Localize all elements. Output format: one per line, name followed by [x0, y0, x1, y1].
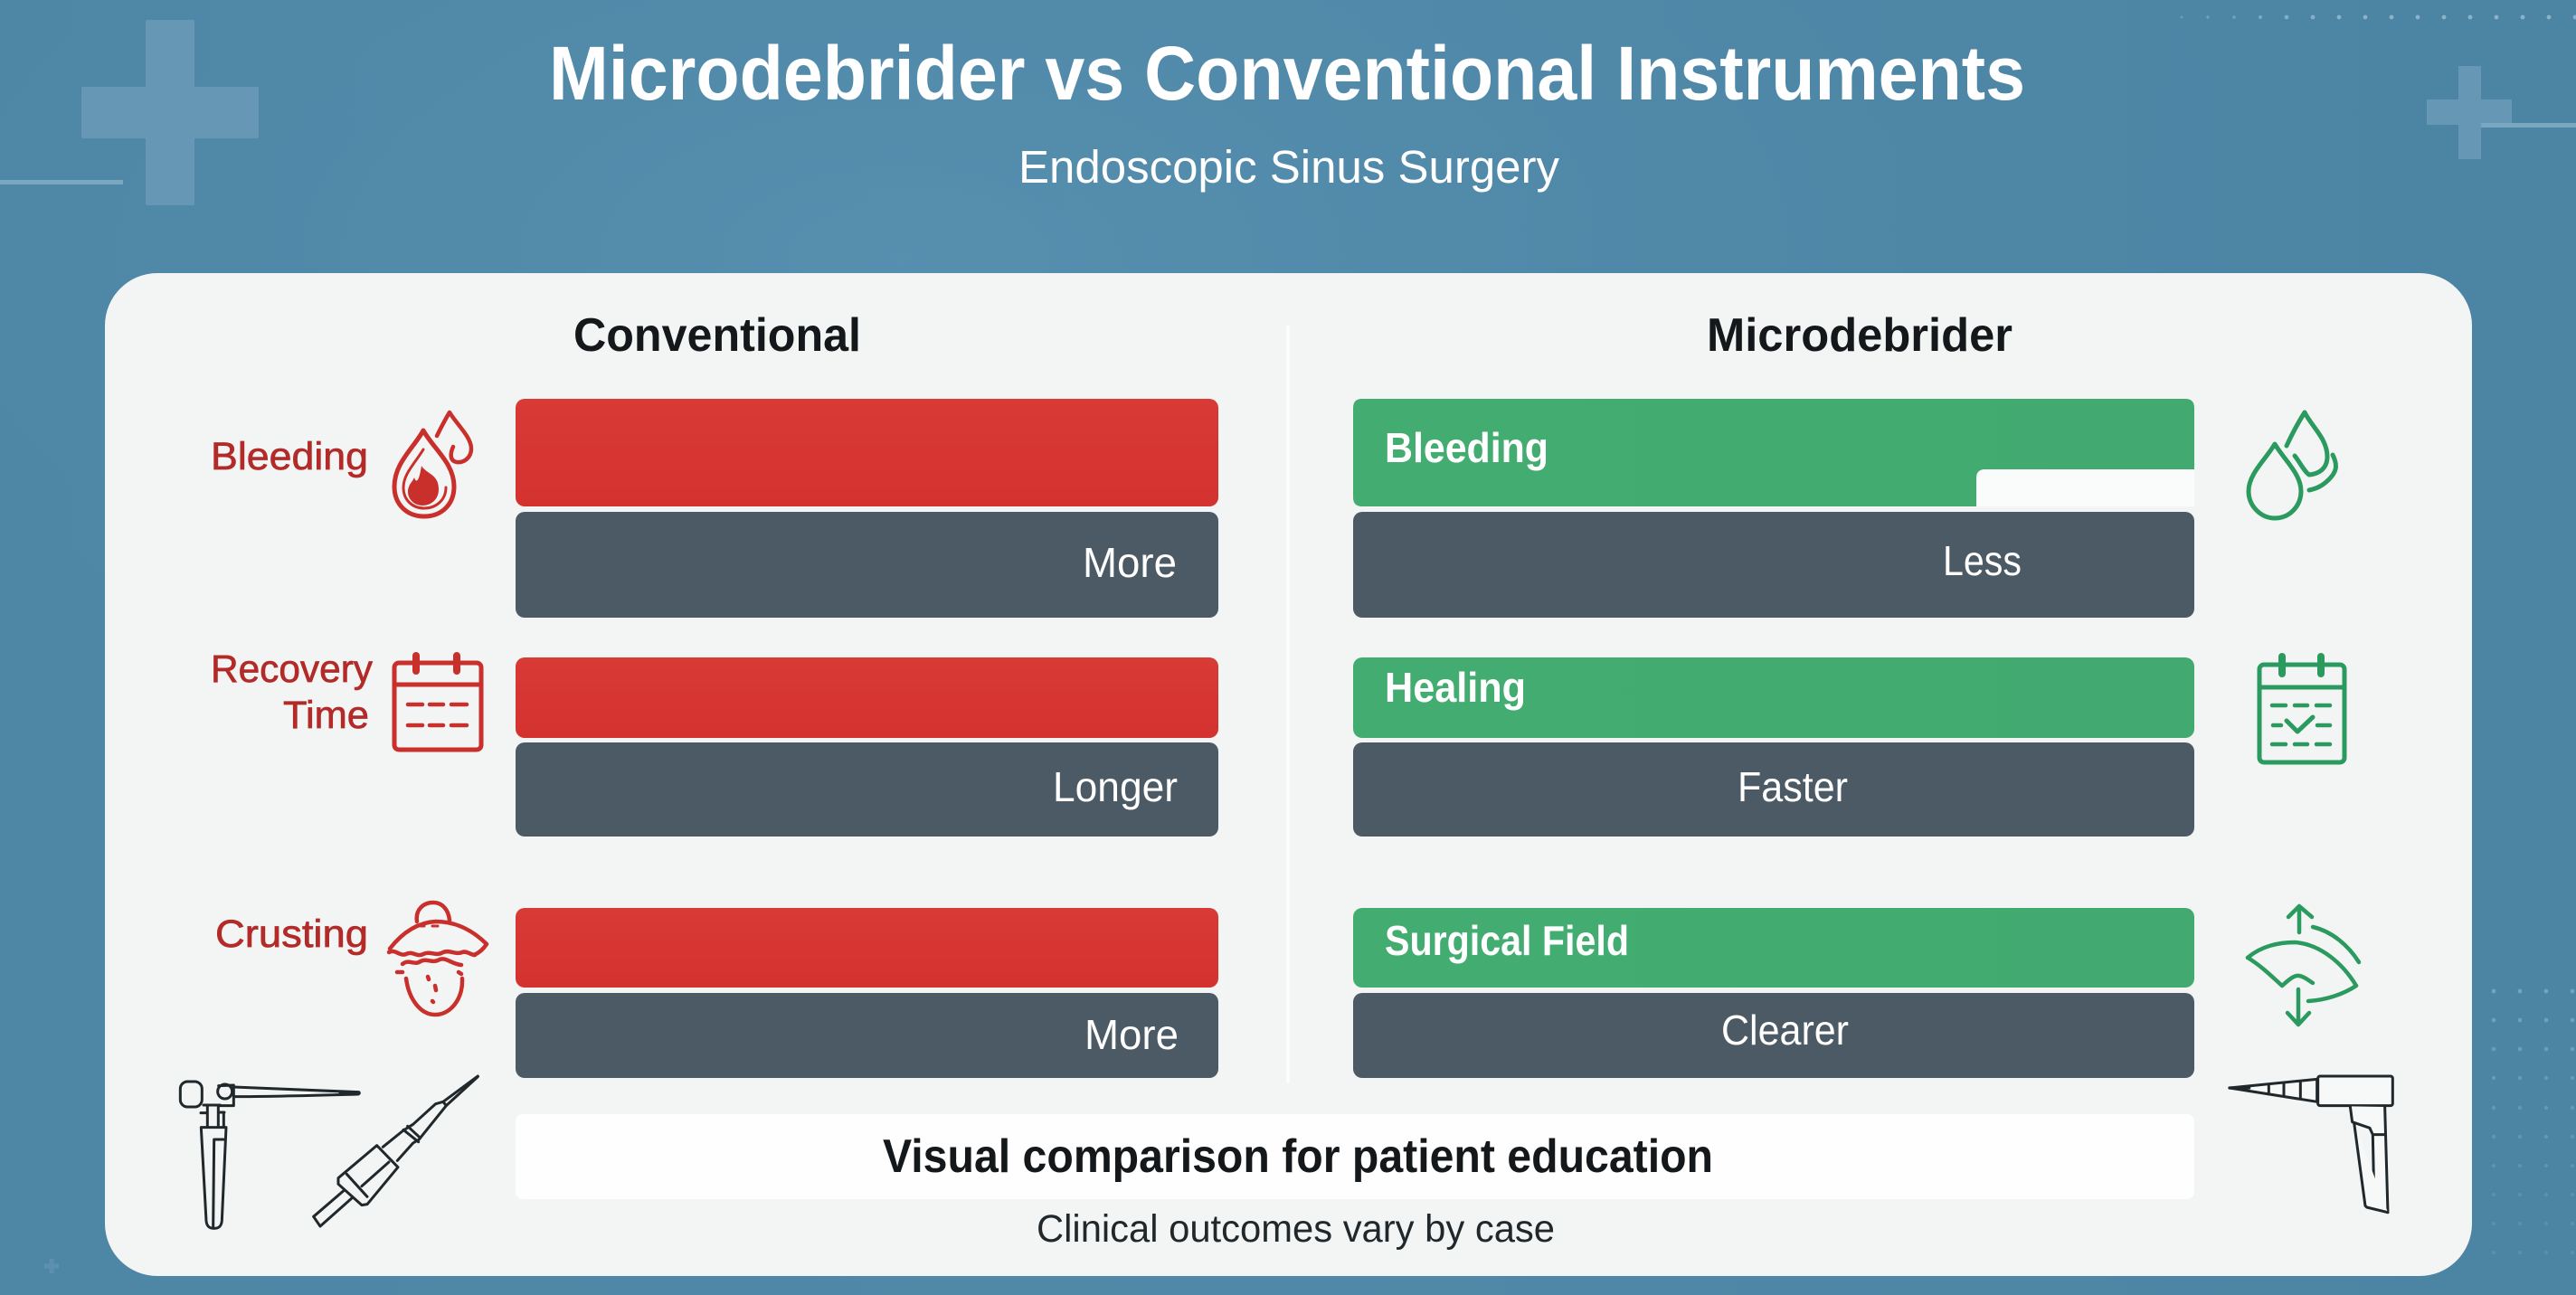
bar: surgical field: Surgical Field	[1385, 917, 1629, 964]
bar: surgical field result: Clearer	[1721, 1007, 1849, 1054]
faint cross bottom-left	[44, 1259, 59, 1273]
bar: healing	[1353, 657, 2194, 738]
decorative dots bottom-right	[2492, 989, 2574, 1254]
icon: red blood drops	[394, 412, 471, 516]
decorative cross top-right	[2427, 66, 2576, 159]
heading: conventional: Conventional	[573, 309, 861, 362]
bar: bleeding severity with notch	[1353, 399, 2194, 506]
bar: bleeding severity	[516, 399, 1218, 506]
icon: microdebrider handpiece	[2230, 1076, 2392, 1213]
label: recovery time: Time	[283, 694, 369, 737]
bar: bleeding severity with notch: Bleeding	[1385, 424, 1548, 471]
bar: surgical field	[1353, 908, 2194, 988]
icon: green calendar with check	[2259, 657, 2344, 762]
icon: conventional suction instrument	[314, 1076, 478, 1226]
subtitle: Endoscopic Sinus Surgery	[1018, 141, 1559, 193]
bar: bleeding result: More	[1083, 539, 1177, 586]
bar: crusting severity	[516, 908, 1218, 988]
bar: bleeding result: Less	[1943, 537, 2022, 584]
bar: healing: Healing	[1385, 664, 1526, 711]
bar: recovery result: Longer	[1053, 763, 1178, 810]
label: crusting: Crusting	[215, 912, 368, 956]
callout: footer banner	[516, 1114, 2194, 1199]
bar: recovery result	[516, 742, 1218, 837]
icon: red calendar	[394, 656, 481, 750]
icon: conventional forceps	[180, 1082, 359, 1228]
callout: footer banner: Visual comparison for patient education	[883, 1130, 1713, 1183]
icon: red crusted nasal tissue	[389, 903, 487, 1015]
panel: microdebrider column	[1353, 309, 2392, 1213]
panel: comparison card	[105, 273, 2472, 1276]
label: recovery time	[211, 648, 373, 737]
bar: bleeding result	[1353, 512, 2194, 618]
label: bleeding: Bleeding	[211, 435, 368, 478]
footnote: Clinical outcomes vary by case	[1037, 1207, 1555, 1251]
heading: microdebrider: Microdebrider	[1707, 309, 2012, 362]
title: Microdebrider vs Conventional Instruments	[549, 31, 2025, 116]
icon: green surgical field with arrows	[2248, 906, 2359, 1025]
bar: crusting result: More	[1084, 1011, 1179, 1058]
bar: surgical field result	[1353, 993, 2194, 1078]
decorative dots top-right	[2180, 15, 2576, 19]
icon: green drops	[2249, 412, 2335, 518]
bar: healing result	[1353, 742, 2194, 837]
label: recovery time: Recovery	[211, 648, 373, 691]
bar: healing result: Faster	[1738, 763, 1848, 810]
bar: crusting result	[516, 993, 1218, 1078]
bar: bleeding result	[516, 512, 1218, 618]
decorative cross top-left	[0, 20, 259, 205]
panel: conventional column	[180, 309, 1218, 1228]
bar: recovery severity	[516, 657, 1218, 738]
